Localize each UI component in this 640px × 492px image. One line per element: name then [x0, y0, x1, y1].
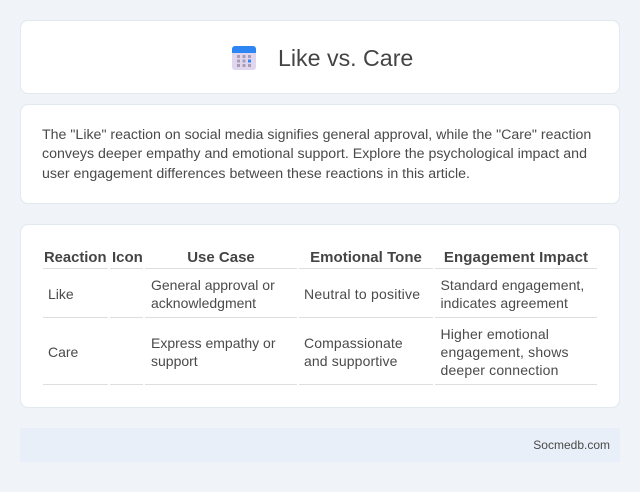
row: Care: engagement, shows: [440, 344, 569, 360]
row: Like: acknowledgment: [151, 295, 256, 311]
row: Care: Care: [48, 344, 78, 360]
row: Care: and supportive: [304, 353, 398, 369]
row: Like: Standard engagement,: [440, 277, 584, 293]
table header: Engagement Impact: [444, 249, 588, 266]
panel: title card: [20, 20, 620, 94]
row: Care: deeper connection: [440, 362, 559, 378]
text block: intro: user engagement differences between these reactions in this article.: [42, 166, 470, 182]
row: Like: indicates agreement: [440, 295, 568, 311]
row: Care: [48, 326, 569, 378]
panel: intro text: [20, 104, 620, 204]
row: Like: [48, 277, 584, 311]
table header: Reaction: [44, 250, 106, 266]
table header: [44, 249, 588, 266]
row: Like: General approval or: [151, 277, 275, 293]
title: Like vs. Care: [278, 45, 413, 71]
row: Care: support: [151, 353, 198, 369]
text block: intro: The "Like" reaction on social media signifies general approval, while the "Care" reaction: [42, 127, 591, 143]
panel: comparison table: [20, 224, 620, 408]
text block: intro: conveys deeper empathy and emotional support. Explore the psychological impact and: [42, 146, 587, 162]
table header: Use Case: [187, 249, 255, 266]
table header: Icon: [112, 249, 143, 266]
row: Like: Like: [48, 286, 74, 302]
footer text: Socmedb.com: [533, 438, 610, 452]
row: Care: Higher emotional: [440, 326, 549, 342]
table header: Emotional Tone: [310, 249, 422, 266]
footer bar: [20, 428, 620, 462]
icon: calendar: [232, 46, 256, 70]
row: Like: Neutral to positive: [304, 286, 420, 302]
text block: intro: [42, 127, 591, 182]
row: Care: Compassionate: [304, 335, 403, 351]
row: Care: Express empathy or: [151, 335, 276, 351]
